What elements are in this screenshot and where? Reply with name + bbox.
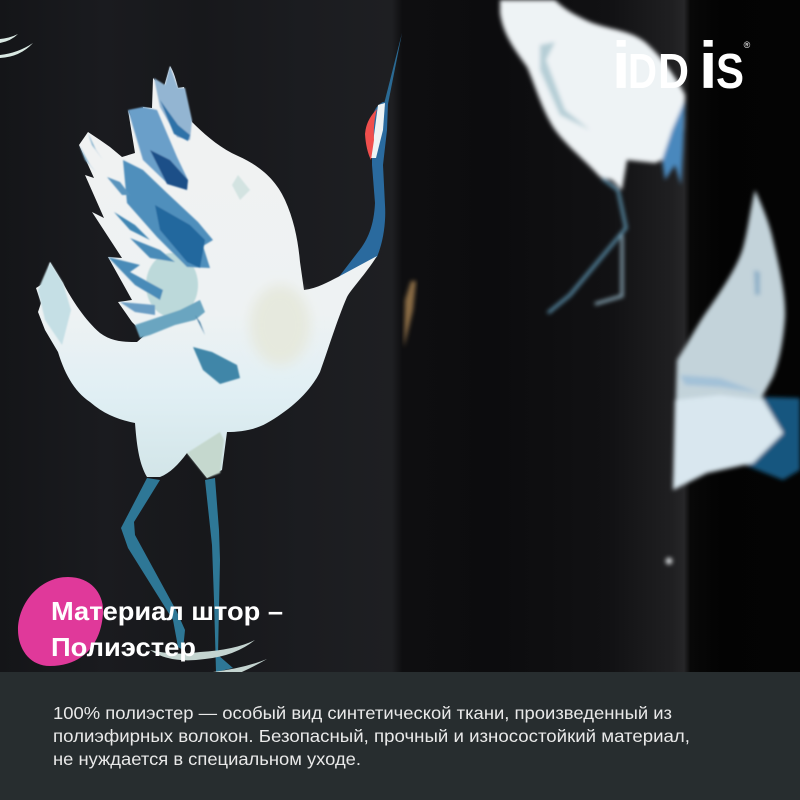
pink blob <box>18 577 103 666</box>
description text: полиэфирных волокон. Безопасный, прочный и износостойкий материал, <box>53 726 690 746</box>
blurred crane wing right <box>666 190 800 564</box>
logo: iDDiS <box>612 28 751 102</box>
main crane <box>36 33 402 676</box>
heading <box>51 596 283 662</box>
blurred crane top centre <box>500 0 685 313</box>
bottom panel <box>0 672 800 800</box>
logo: iDDiS: i <box>699 28 717 102</box>
gold fold accent <box>404 281 416 347</box>
crane legs <box>121 478 233 672</box>
blurred crane legs <box>548 178 626 313</box>
logo: iDDiS: i <box>612 28 630 102</box>
description text: 100% полиэстер — особый вид синтетической ткани, произведенный из <box>53 703 672 723</box>
description text <box>53 703 690 769</box>
description text: не нуждается в специальном уходе. <box>53 749 361 769</box>
crane tips top-left <box>0 34 33 58</box>
logo: iDDiS: D <box>658 45 689 99</box>
heading: Полиэстер <box>51 632 196 662</box>
crane neck and beak <box>338 33 402 278</box>
blurred crane body <box>500 0 685 190</box>
heading: Материал штор – <box>51 596 283 626</box>
logo: iDDiS: ® <box>744 40 751 50</box>
logo: iDDiS: D <box>628 45 657 99</box>
crane feet <box>150 640 267 676</box>
crane wing shading <box>38 66 310 478</box>
crane body and wing <box>36 66 377 478</box>
logo: iDDiS: S <box>716 45 744 99</box>
